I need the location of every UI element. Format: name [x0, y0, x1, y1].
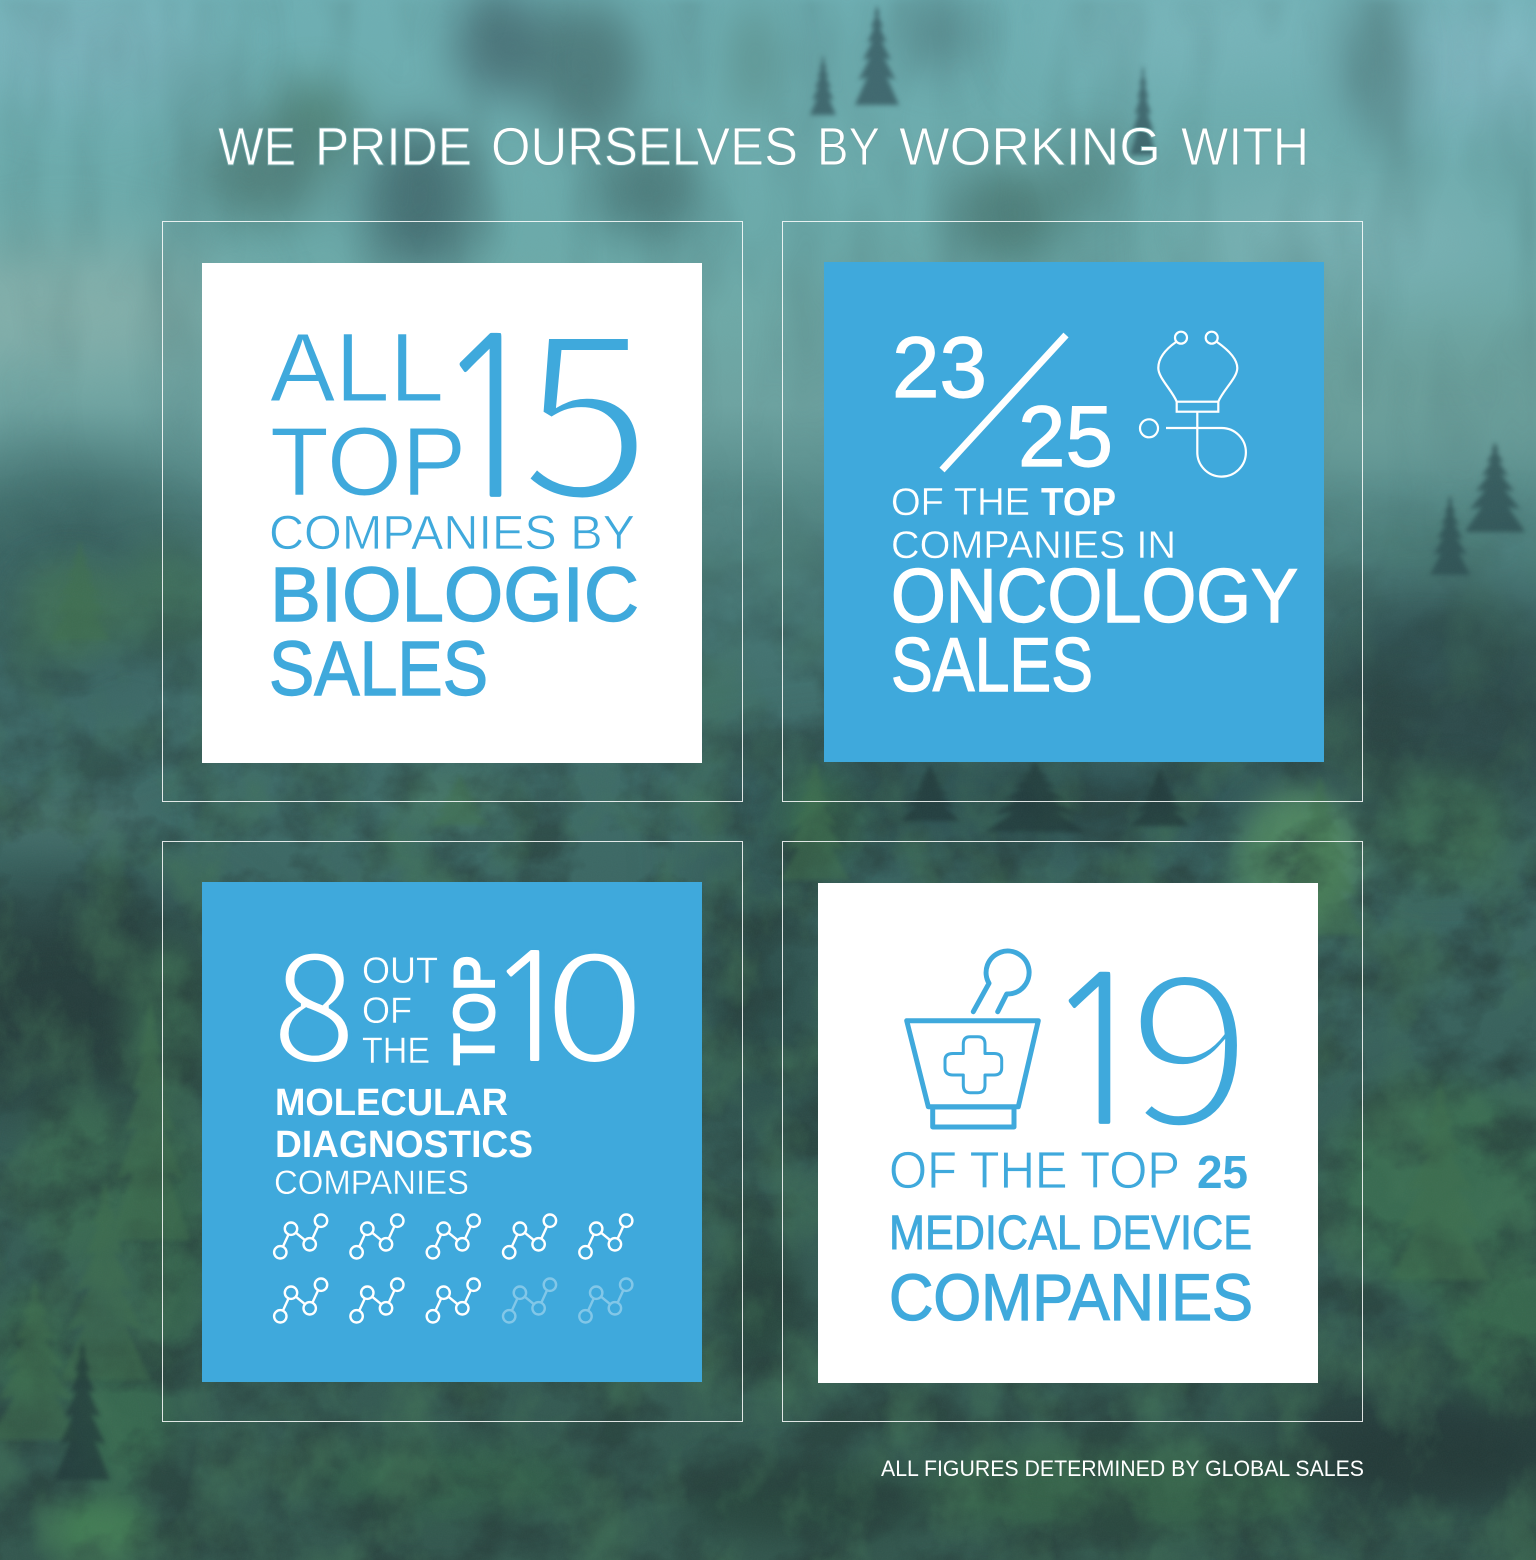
title: WE — [218, 117, 296, 177]
label: out of the: OF — [362, 990, 412, 1031]
label: of the top 25: OF THE TOP — [889, 1142, 1180, 1200]
label: of the top companies in — [891, 481, 1176, 567]
label: biologic sales: BIOLOGIC — [270, 552, 639, 638]
figure: 10: 0 — [543, 886, 646, 1106]
label: oncology sales: SALES — [891, 623, 1093, 708]
figure: 15 — [432, 234, 653, 564]
title: OURSELVES — [491, 117, 798, 177]
figure: 19: 1 — [1041, 948, 1156, 1154]
figure: 23 of 25: 25 — [1018, 389, 1113, 485]
panel: biologic sales — [162, 222, 742, 802]
figure: 15: 5 — [519, 234, 653, 564]
figure: 10: 1 — [485, 933, 575, 1083]
panel: medical device companies — [782, 842, 1362, 1422]
panel: oncology sales — [782, 222, 1362, 802]
label: out of the: THE — [362, 1030, 430, 1071]
label: molecular diagnostics companies: COMPANIES — [274, 1164, 469, 1202]
figure: 19: 9 — [1127, 883, 1253, 1187]
label: molecular diagnostics companies: MOLECULAR — [275, 1082, 508, 1124]
label: oncology sales: ONCOLOGY — [891, 554, 1298, 639]
label: of the top companies in: TOP — [1041, 481, 1116, 524]
label: of the top 25: 25 — [1197, 1146, 1248, 1198]
icon: mortar and pestle — [907, 951, 1038, 1127]
label: biologic sales — [269, 552, 639, 712]
figure: 10 — [485, 886, 646, 1106]
figure: 23 of 25 — [892, 320, 1113, 485]
label: out of the — [362, 950, 438, 1071]
icons: 8 of 10 molecules — [274, 1214, 632, 1323]
label: medical device: MEDICAL DEVICE — [889, 1207, 1252, 1260]
label: oncology sales — [891, 554, 1298, 708]
figure: 8: 8 — [271, 886, 357, 1106]
panel: molecular diagnostics — [162, 842, 742, 1422]
icon: stethoscope — [1140, 332, 1246, 477]
label: top (rotated): TOP — [441, 955, 508, 1066]
label: companies: COMPANIES — [889, 1260, 1253, 1334]
title: BY — [817, 117, 880, 177]
label: molecular diagnostics companies: DIAGNOSTICS — [275, 1124, 533, 1166]
label: all top — [270, 313, 466, 516]
label: all top: ALL — [270, 313, 444, 422]
title: WITH — [1181, 117, 1309, 177]
figure: 19 — [1041, 883, 1253, 1187]
title — [218, 117, 1309, 177]
label: out of the: OUT — [362, 950, 438, 991]
label: of the top companies in: COMPANIES IN — [891, 524, 1176, 567]
figure: 15: 1 — [432, 307, 547, 529]
label: of the top companies in: OF THE — [891, 481, 1030, 524]
label: companies by: COMPANIES BY — [269, 507, 635, 560]
figure: 23 of 25: 23 — [892, 320, 987, 416]
label: all top: TOP — [270, 407, 466, 516]
title: WORKING — [899, 117, 1161, 177]
label: biologic sales: SALES — [269, 626, 488, 712]
label: molecular diagnostics companies — [274, 1082, 533, 1202]
footnote: ALL FIGURES DETERMINED BY GLOBAL SALES — [881, 1456, 1364, 1481]
title: PRIDE — [315, 117, 472, 177]
